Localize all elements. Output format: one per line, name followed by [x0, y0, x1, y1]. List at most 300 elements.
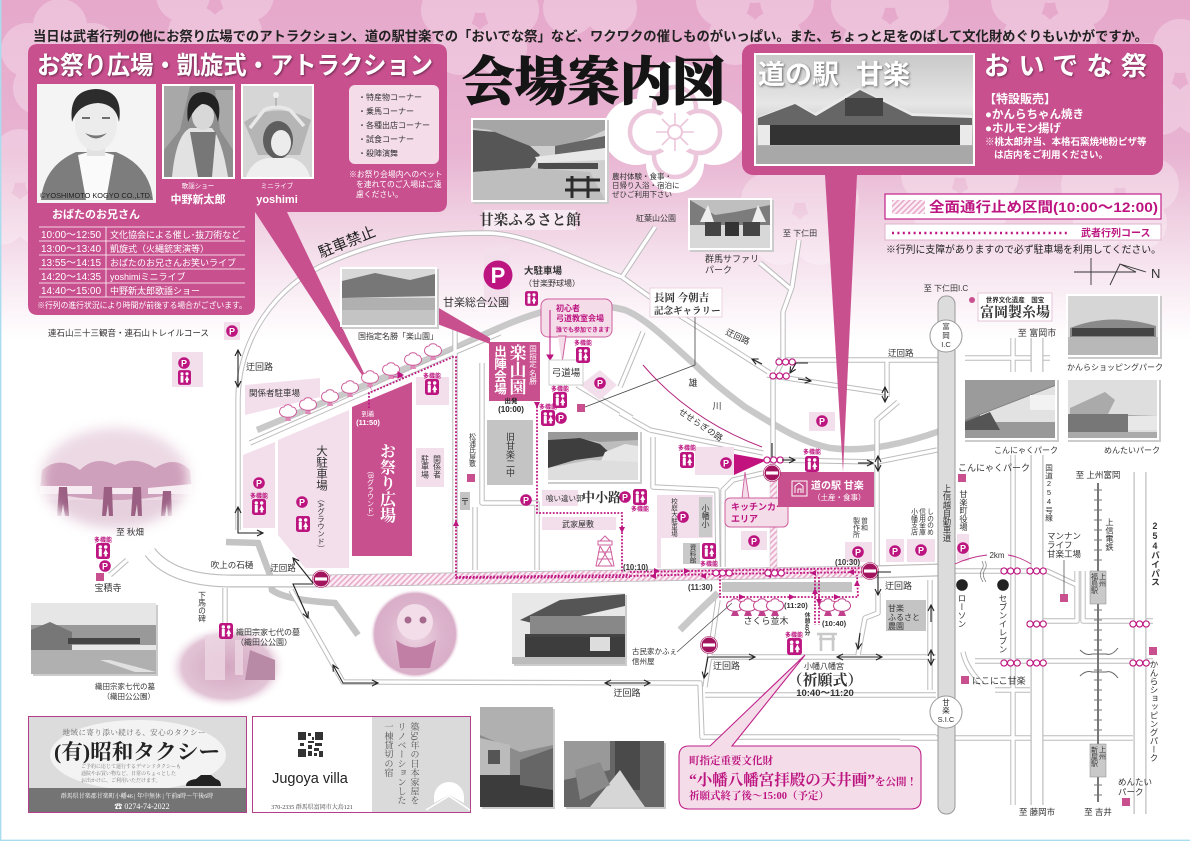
timetable: 14:20〜14:35 [41, 272, 101, 283]
attractions list: ・試食コーナー [358, 135, 414, 144]
photo: Oda family graves [31, 603, 158, 676]
roadside station map block: （土産・食事） [813, 492, 866, 502]
label: staff parking diagonal: 関係者駐車場 [249, 388, 301, 398]
small shop labels: 製作所 [852, 516, 860, 539]
post office mark [460, 492, 470, 510]
school block: old Kanra second junior high [487, 420, 533, 485]
label: archery hall: 弓道場 [552, 367, 581, 379]
parking icons: P [256, 478, 262, 488]
caption: Oda family graves: （織田公公園） [102, 691, 155, 701]
right side map labels: 甘楽町役場 [958, 489, 968, 532]
label: Nakakoji [546, 490, 621, 505]
parking icons: P [855, 548, 861, 558]
label: Tomioka Silk Mill: 世界文化遺産 国宝 [986, 295, 1045, 304]
legend: samurai procession course: 武者行列コース [1081, 226, 1150, 240]
restroom icons: 多機能 [539, 403, 557, 411]
small shop labels: しののめ [926, 508, 934, 535]
central map: school and public labels: 小幡小 [701, 504, 710, 529]
interchange: Tomioka [930, 320, 962, 352]
special sales list [984, 91, 1147, 161]
interchange: Kanra: 甘 [942, 697, 950, 707]
timetable footnote: ※行列の進行状況により時間が前後する場合がございます。 [37, 300, 247, 310]
label: staff parking vertical: 関係者 [432, 455, 442, 479]
procession time labels [623, 558, 861, 637]
restroom icons: 多機能 [423, 372, 441, 380]
restroom icons: 多機能 [250, 492, 268, 500]
triple circle road blocks [713, 359, 1149, 666]
icon: taxi [186, 775, 221, 786]
label: staff parking vertical: 駐車場 [420, 454, 430, 479]
ad: Showa Taxi: 地域に寄り添い続ける、安心のタクシー [62, 727, 206, 737]
timetable: 凱旋式（火縄銃実演等） [110, 243, 209, 254]
label: detour by stop: 迂回路 [270, 563, 296, 573]
cherry blossom trees [280, 344, 441, 421]
roadside station map block: 道の駅 甘楽 [811, 479, 864, 492]
right side map labels: 至 吉井 [1084, 807, 1112, 817]
right side map labels: 至 富岡市 [1018, 327, 1056, 338]
venue box: Rakusanen departure: 国指定 名勝 [528, 345, 538, 386]
station: Joshu Fukushima [1090, 571, 1106, 604]
interchange: Tomioka: 岡 [942, 331, 950, 340]
river [257, 306, 940, 449]
interchange: Kanra: S.I.C [938, 715, 955, 724]
parking icons: P [960, 544, 966, 554]
small shop labels: 曽和 [860, 516, 868, 532]
attractions list [349, 85, 439, 164]
callout: beginners archery [541, 299, 612, 363]
kitchen car area: キッチンカー [731, 502, 785, 512]
photo captions: おばたのお兄さん [52, 207, 140, 221]
central map: school and public labels: 資料館 [688, 543, 696, 565]
note: farm experience: 日帰り入浴・宿泊に [612, 180, 680, 190]
pink creek path [643, 365, 762, 447]
venue box: Rakusanen departure: 楽山園 [506, 344, 526, 395]
kamon family crest [603, 62, 747, 193]
label: Kanra Furusato-kan: 甘楽ふるさと館 [479, 211, 581, 229]
lower-centre canal [680, 593, 718, 630]
pet notice [349, 169, 443, 199]
label: Momijiyama park: 紅葉山公園 [636, 213, 676, 223]
icon: fire tower [596, 536, 614, 566]
photo: Mentai Park [1066, 378, 1161, 442]
photo: Gunma Safari Park [688, 198, 774, 252]
label: Oda graves map: （織田公公園） [236, 637, 292, 647]
photo: old house cafe [512, 593, 627, 666]
festival plaza block: 到着 [362, 409, 375, 418]
timetable: おばたのお兄さんお笑いライブ [110, 257, 236, 268]
note: farm experience [612, 171, 680, 199]
caption: Rakusanen: 国指定名勝「楽山園」 [358, 331, 438, 341]
label: A ground parking [315, 444, 328, 553]
restroom icons: 多機能 [803, 448, 821, 456]
pet notice: 慮ください。 [356, 189, 403, 199]
ad: Showa Taxi: 通院やお買い物など、日常のちょっとした [81, 770, 176, 777]
station name on photo: 道の駅 [758, 53, 839, 92]
right side map labels: 至 下仁田I.C [924, 283, 968, 293]
ad: Showa Taxi: (有)昭和タクシー [54, 740, 220, 764]
procession time labels: (11:30) [688, 583, 713, 592]
photo: Konnyaku Park [963, 378, 1059, 442]
panel heading: お祭り広場・凱旋式・アトラクション [37, 46, 433, 82]
restroom icons: 多機能 [94, 536, 112, 544]
label: Oda graves map: 織田宗家七代の墓 [236, 627, 300, 637]
parking icons: P [299, 498, 305, 508]
label: expressway: 上信越自動車道 [942, 484, 952, 543]
right side map labels: めんたい [1118, 777, 1152, 787]
compass north arrow [1074, 258, 1160, 285]
attractions list: ・殺陣演舞 [358, 148, 398, 158]
compass north arrow: N [1151, 266, 1160, 281]
label: detour south: 迂回路 [885, 580, 912, 591]
label: Nagaoka gallery [650, 288, 722, 317]
interchange: Kanra: 楽 [942, 705, 950, 715]
farm box [886, 600, 926, 631]
expressway [938, 296, 955, 814]
right side map labels: 至 上州富岡 [1076, 470, 1120, 480]
ad: Showa Taxi: ☎ 0274-74-2022 [114, 802, 170, 811]
label: Obata Hachimangu prayer ceremony: （祈願式） [787, 671, 863, 689]
label: Tomioka Silk Mill [978, 293, 1052, 321]
photo: roadside station [754, 53, 975, 166]
ad: Jugoya villa [252, 716, 470, 812]
right side map labels: パーク [1118, 787, 1144, 797]
road casing [110, 227, 1153, 805]
departure time [498, 396, 524, 414]
parking icons: P [680, 512, 686, 522]
no entry signs [312, 464, 878, 654]
parking icons: P [892, 546, 898, 556]
timetable: yoshimiミニライブ [110, 271, 186, 282]
photo: cherry tree house [480, 707, 555, 809]
restroom icons: 多機能 [631, 505, 649, 513]
special sales list: は店内をご利用ください。 [994, 149, 1108, 161]
label: Geba monument: 下馬の碑 [197, 591, 206, 623]
festival plaza block: （Bグラウンド） [366, 467, 374, 521]
label: detour south of sign: 迂回路 [713, 660, 740, 671]
station: Joshu Fukushima: 福島駅 [1090, 572, 1098, 595]
label: Fukiage stone conduit: 吹上の石樋 [211, 560, 254, 570]
label: staff parking vertical [420, 454, 442, 479]
label: detour diagonal: 迂回路 [724, 327, 752, 347]
label: Gunma Safari Park: 群馬サファリ [705, 253, 759, 264]
parking icons: P [723, 458, 729, 468]
legend: full closure: 全面通行止め区間(10:00〜12:00) [929, 199, 1158, 215]
light pink parking lots [172, 245, 969, 568]
procession time labels: (10:30) [835, 558, 861, 567]
attractions list: ・乗馬コーナー [358, 106, 414, 116]
central map: school and public labels: 雄 [688, 377, 698, 388]
departure time: 出発 [504, 396, 518, 405]
sakura avenue [727, 599, 850, 626]
2km distance marker: 2km [989, 551, 1005, 560]
parking icons: P [918, 546, 924, 556]
detour arrows [238, 350, 931, 683]
label: Seseragi path: せせらぎの路 [677, 406, 725, 443]
label: archery hall [549, 360, 583, 385]
photo captions: ミニライブ [261, 181, 294, 190]
timetable [39, 227, 245, 297]
callout: beginners archery: 誰でも参加できます [556, 326, 610, 334]
speech tail to plaza [255, 212, 373, 392]
panel: roadside station festival [742, 44, 1163, 472]
parking icons: P [102, 562, 108, 572]
label: Nagaoka gallery: 長岡 今朝吉 [654, 291, 710, 304]
label: A ground parking: 大駐車場 [315, 444, 328, 492]
timetable: 文化協会による催し･抜刀術など [110, 229, 240, 240]
road fill [110, 227, 1153, 805]
ad: Showa Taxi: ご予約に応じて運行するデマンドタクシーも [81, 763, 181, 770]
venue box: Rakusanen departure [489, 342, 540, 401]
interchange: Tomioka: 富 [942, 321, 950, 331]
parking icons: P [622, 492, 628, 502]
timetable: 中野新太郎歌謡ショー [110, 285, 200, 296]
panel: festival plaza attractions [28, 44, 447, 392]
label: Obata Hachimangu prayer ceremony: 10:40〜11:20 [796, 688, 854, 699]
ad: Showa Taxi [28, 716, 246, 812]
wide road casing [150, 338, 1140, 814]
special sales list: 【特設販売】 [984, 91, 1056, 106]
parking icons: P [751, 536, 757, 546]
photo: Obata no Oniisan [37, 84, 156, 203]
label: Obata Hachimangu prayer ceremony [787, 661, 863, 699]
2km distance marker [955, 551, 1031, 582]
roadside station map block [778, 472, 874, 507]
kitchen car area: エリア [731, 514, 758, 524]
callout: Obata Hachimangu ceiling paintings: 祈願式終了後〜15:00（予定） [689, 789, 829, 802]
attractions list: ・各種出店コーナー [358, 120, 430, 130]
small shop labels [852, 507, 934, 539]
central map: school and public labels [670, 377, 722, 565]
photo captions [52, 181, 298, 221]
icon: moon and roof [434, 782, 464, 803]
station: Joshu Niiya: 上州 [1098, 745, 1106, 760]
convenience stores: セブンイレブン [998, 594, 1008, 654]
ad: Showa Taxi: お出かけに、ご利用いただけます。 [81, 777, 161, 784]
caption: Konnyaku Park: こんにゃくパーク [994, 446, 1058, 455]
photo: yoshimi [241, 84, 314, 179]
oval photo: samurai procession [37, 424, 193, 533]
legend: samurai procession course [885, 224, 1161, 240]
large parking: baseball field: P [491, 263, 505, 288]
procession time labels: (11:20) [784, 601, 808, 610]
label: Gunma Safari Park: パーク [705, 265, 732, 275]
photo: garden path [564, 741, 666, 809]
large parking: baseball field [484, 260, 580, 306]
left: to Akihata: 至 秋畑 [116, 527, 144, 537]
parking icons: P [523, 496, 529, 506]
festival heading: おいでな祭 [984, 46, 1147, 83]
wide road fill [150, 338, 1140, 814]
photo: Rakusanen scenic spot [340, 267, 490, 344]
parking icons: P [597, 378, 603, 388]
ad: Jugoya villa: 一棟貸切の宿 [383, 722, 394, 778]
kitchen car area [725, 454, 788, 527]
label: A ground parking: （Aグラウンド） [316, 495, 326, 553]
post office mark: 〒 [460, 497, 470, 507]
label: Matsuura residence [467, 432, 476, 482]
map roads [110, 227, 1153, 814]
label: Nakakoji: 喰い違い郭 [546, 493, 584, 503]
right side map labels: マンナン [1047, 531, 1081, 541]
festival plaza block [352, 382, 412, 556]
photo: Kanra shopping park [1066, 294, 1162, 359]
interchange: Tomioka: I.C [941, 340, 951, 349]
qr code [298, 732, 323, 757]
pet notice: を連れてのご入場はご遠 [356, 179, 442, 189]
black leader to archery square [577, 317, 695, 412]
photo: Kanra Furusato-kan [471, 118, 609, 204]
farm box: 甘楽 [888, 603, 904, 613]
right side map labels [924, 283, 1160, 817]
right side map labels: 至 藤岡市 [1019, 807, 1056, 817]
ad: Showa Taxi: 群馬県甘楽郡甘楽町小幡46 | 年中無休 | 午前8時〜午後6時 [61, 792, 213, 800]
photo: Nakano Shintaro [162, 84, 235, 179]
timetable: 10:00〜12:50 [41, 230, 101, 241]
station: Joshu Niiya: 新屋駅 [1090, 745, 1098, 768]
special sales list: ●かんらちゃん焼き [985, 107, 1084, 121]
large parking: baseball field: 大駐車場 [524, 265, 563, 277]
callout: beginners archery: 弓道教室会場 [556, 313, 604, 323]
photo captions: 歌謡ショー [182, 181, 214, 190]
procession direction arrows [393, 372, 860, 605]
no parking road label: 駐車禁止 [316, 223, 378, 262]
timetable: 13:00〜13:40 [41, 244, 101, 255]
right side map labels: 国道254号線 [1044, 464, 1054, 522]
label: to Shimonita: 至 下仁田 [783, 228, 817, 238]
label: old house cafe: 古民家かふぇ [632, 646, 677, 656]
right side map labels: こんにゃくパーク [958, 463, 1030, 473]
caption: Kanra shopping park: かんらショッピングパーク [1067, 362, 1163, 372]
label: old house cafe: 信州屋 [632, 657, 655, 666]
label: detour left: 迂回路 [246, 361, 273, 372]
parking icons: P [558, 414, 564, 424]
pink location squares [96, 297, 1157, 806]
right side map labels: 254バイパス [1150, 521, 1160, 586]
farm box: 農園 [888, 621, 904, 631]
closed section hatching [322, 480, 870, 587]
speech tail to station [825, 175, 857, 472]
restroom icons: 多機能 [574, 339, 592, 347]
departure time: (10:00) [498, 405, 524, 414]
oval photo: shrine street [167, 625, 287, 709]
photo captions: yoshimi [256, 194, 298, 206]
right side map labels: 甘楽工場 [1047, 549, 1082, 559]
round photo: mascot [370, 589, 460, 679]
label: Rensekiyama course: 連石山三十三観音・連石山トレイルコース [48, 328, 209, 338]
right side map labels: ライフ [1047, 540, 1073, 550]
ad: Jugoya villa: 築50年の日本家屋を [409, 721, 420, 805]
label: Tomioka Silk Mill: 富岡製糸場 [980, 304, 1050, 321]
central map: school and public labels: 校庭大駐車場 [670, 497, 678, 538]
label: Gunma Safari Park [705, 253, 759, 275]
procession time labels: 休憩40分 [803, 611, 810, 637]
venue box: Rakusanen departure: 出陣会場 [492, 345, 506, 396]
title: 会場案内図 [462, 54, 725, 112]
school block: old Kanra second junior high: 旧甘楽二中 [505, 432, 515, 478]
special sales list: ●ホルモン揚げ [985, 121, 1061, 135]
pet notice: ※お祭り会場内へのペット [349, 169, 443, 179]
ad: Jugoya villa: 370-2335 群馬県富岡市大島121 [271, 803, 353, 811]
photo credit: ©YOSHIMOTO KOGYO CO.,LTD. [40, 191, 152, 200]
parking icons [99, 325, 969, 572]
label: Nagaoka gallery: 記念ギャラリー [654, 305, 721, 317]
parking icons: P [229, 326, 235, 336]
background flower pattern [0, 0, 1190, 265]
label: Oda graves map [219, 623, 300, 647]
timetable: 13:55〜14:15 [41, 258, 101, 269]
ad: Jugoya villa: Jugoya villa [272, 771, 349, 787]
procession time labels: (10:10) [623, 563, 649, 572]
convenience stores [956, 579, 1009, 654]
right side map labels: 上信電鉄 [1104, 518, 1114, 552]
photo: Nakakoji lane [546, 430, 642, 484]
procession route dots [369, 357, 870, 625]
farm box: ふるさと [888, 613, 920, 622]
label: samurai residence: 武家屋敷 [562, 519, 594, 529]
intro sentence: 当日は武者行列の他にお祭り広場でのアトラクション、道の駅甘楽での「おいでな祭」など、ワクワクの催しものがいっぱい。また、ちょっと足をのばして文化財めぐりもいかがですか。 [33, 25, 1148, 45]
special sales list: ※桃太郎弁当、本格石窯焼地粉ピザ等 [985, 136, 1147, 148]
small shop labels: 小幡支店 [910, 507, 918, 536]
restroom icons: 多機能 [551, 385, 569, 393]
restroom icons: 多機能 [700, 560, 718, 568]
icon: torii gate [817, 634, 837, 651]
timetable: 14:40〜15:00 [41, 286, 101, 297]
label: Matsuura residence: 松浦氏屋敷 [468, 432, 476, 468]
note: farm experience: ぜひご利用下さい [612, 189, 672, 199]
tail to Rakusanen venue [432, 304, 490, 344]
station: Joshu Niiya [1090, 744, 1106, 777]
panel shape [742, 44, 1163, 175]
station: Joshu Fukushima: 上州 [1098, 572, 1106, 587]
legend: full closure [885, 194, 1161, 219]
label: detour bottom: 迂回路 [613, 687, 641, 698]
left: Houshakuji label: 宝積寺 [94, 582, 122, 593]
lower-left canal [226, 542, 358, 635]
attractions list: ・特産物コーナー [358, 92, 422, 102]
festival plaza block: お祭り広場 [378, 443, 396, 523]
note: farm experience: 農村体験・食事・ [612, 171, 672, 181]
convenience stores: ローソン [957, 594, 967, 628]
central map: school and public labels: 川 [712, 401, 722, 411]
ad: Jugoya villa: リノベーションした [396, 722, 407, 805]
label: old house cafe [632, 603, 732, 666]
label: Kanra Sogo Park: 甘楽総合公園 [443, 295, 509, 309]
label: Obata Hachimangu prayer ceremony: 小幡八幡宮 [804, 661, 844, 671]
small shop labels: 信用金庫 [918, 507, 926, 536]
right side map labels: かんらショッピングパーク [1149, 660, 1159, 762]
festival plaza block: (11:50) [356, 418, 380, 427]
large parking: baseball field: （甘楽野球場） [524, 278, 580, 288]
photo captions: 中野新太郎 [170, 192, 226, 206]
caption: Oda family graves [95, 681, 155, 701]
callout: beginners archery: 初心者 [556, 303, 580, 313]
station name on photo: 甘楽 [856, 53, 910, 92]
legend note: ※行列に支障がありますので必ず駐車場を利用してください。 [886, 243, 1161, 256]
parking icons: P [819, 416, 825, 426]
callout: Obata Hachimangu ceiling paintings: 町指定重要文化財 [689, 754, 773, 767]
sakura avenue: さくら並木 [743, 615, 789, 626]
pink gradient header wash [0, 0, 1190, 340]
callout: Obata Hachimangu ceiling paintings: “小幡八幡宮拝殿の天井画”を公開！ [689, 770, 917, 789]
callout: Obata Hachimangu ceiling paintings [679, 655, 921, 809]
restroom icons: 多機能 [785, 631, 803, 639]
restroom icons [94, 339, 821, 655]
parking icons: P [181, 358, 187, 368]
right side map labels: にこにこ甘楽 [972, 675, 1026, 686]
restroom icons: 多機能 [678, 444, 696, 452]
railway [1080, 483, 1118, 802]
label: Nakakoji: 中小路 [582, 490, 621, 505]
